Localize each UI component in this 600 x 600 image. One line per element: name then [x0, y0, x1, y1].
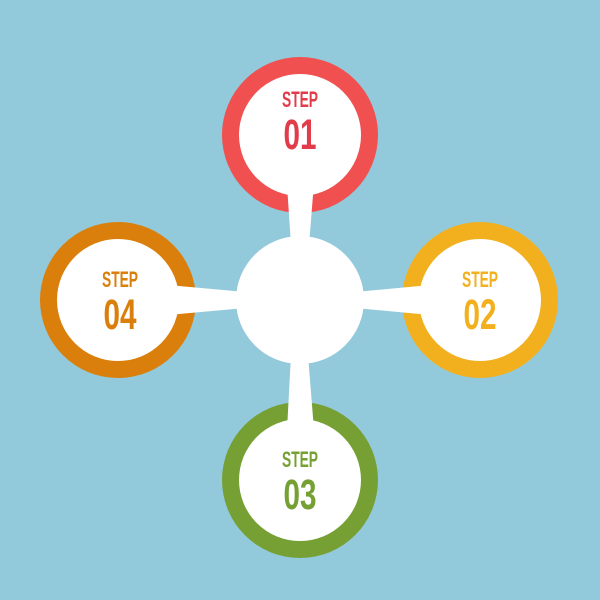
- step 1 label: 01: [284, 111, 316, 159]
- step 4 label: [102, 267, 138, 339]
- step 4 ring: [40, 222, 196, 378]
- step 2 ring: [402, 222, 558, 378]
- step 1 ring: [222, 57, 378, 213]
- center circle: [236, 236, 364, 364]
- step 1 label: STEP: [282, 87, 318, 112]
- connectors: [168, 170, 430, 430]
- step 2 label: 02: [464, 291, 496, 339]
- step 1 label: [282, 87, 318, 159]
- step 2 label: STEP: [462, 267, 498, 292]
- step 3 label: [282, 447, 318, 519]
- step 2 label: [462, 267, 498, 339]
- step 4 label: STEP: [102, 267, 138, 292]
- step 3 label: STEP: [282, 447, 318, 472]
- step 3 label: 03: [284, 471, 316, 519]
- step 3 ring: [222, 402, 378, 558]
- step 4 label: 04: [104, 291, 137, 339]
